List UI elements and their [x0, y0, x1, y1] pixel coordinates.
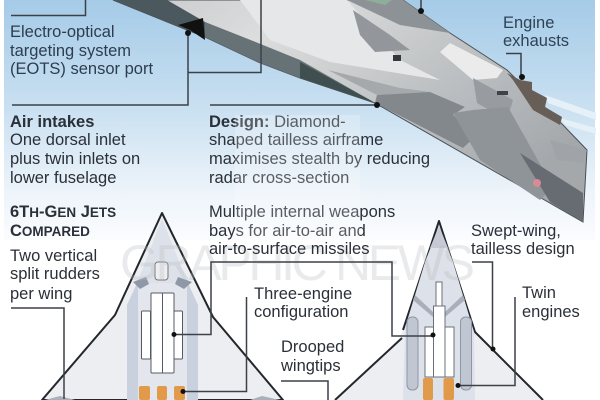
fuselage [113, 0, 587, 222]
text: design: shaped tailless airframe [209, 131, 383, 149]
left jet [42, 213, 283, 400]
dark nose underside [113, 0, 205, 37]
dorsal edge [347, 0, 450, 33]
text: three-engine configuration: Three-engine [254, 285, 352, 303]
watermark: GRAPHIC NEWS [120, 235, 475, 291]
leader: weapons bays [174, 262, 433, 336]
main jet illustration [113, 0, 587, 222]
leader: targeting top-left [11, 0, 86, 16]
text: three-engine configuration: configuration [254, 303, 348, 321]
text: engine exhausts: Engine [503, 14, 554, 32]
fuselage [403, 226, 475, 400]
text: swept-wing: Swept-wing, [471, 222, 561, 240]
text: weapons bays: bays for air-to-air and [209, 222, 366, 240]
text: design: Design: Diamond- [209, 113, 346, 131]
text: air intakes: plus twin inlets on [10, 150, 140, 168]
text: air intakes: One dorsal inlet [10, 131, 126, 149]
dot: three-engine [180, 389, 186, 394]
light plate [440, 43, 503, 80]
text: design: maximises stealth by reducing [209, 150, 430, 168]
rear belly panel [453, 107, 553, 200]
wings [42, 213, 283, 400]
text: split rudders [10, 247, 100, 303]
dark stripes [520, 153, 583, 222]
leader: EOTS [12, 0, 261, 105]
text: twin engines: Twin [522, 284, 556, 302]
lower fold [205, 22, 375, 103]
dot: swept-wing [490, 346, 496, 352]
text: comparison heading: COMPARED [10, 222, 90, 240]
dot: engine exhausts [519, 74, 525, 80]
text: drooped wingtips [280, 338, 344, 375]
leader: drooped wingtips [281, 381, 328, 400]
text: design [209, 113, 430, 187]
text: swept-wing: tailless design [471, 240, 575, 258]
weapons bays [142, 293, 182, 373]
side pods [407, 317, 418, 390]
leader: engine exhausts [506, 54, 521, 77]
three engines [139, 386, 185, 400]
intake fairing [473, 78, 513, 120]
exhaust nozzles [507, 73, 562, 125]
intakes [133, 277, 149, 289]
leader: split rudders [11, 308, 64, 399]
sensor port [178, 18, 205, 40]
right jet [335, 221, 543, 400]
dark wedge [300, 62, 375, 103]
dot: weapons left [172, 332, 176, 337]
dot: EOTS [185, 30, 191, 36]
text: air intakes: lower fuselage [10, 169, 116, 187]
text: split rudders: split rudders [10, 265, 100, 283]
text: weapons bays: Multiple internal weapons [209, 203, 395, 221]
upper dark panel [353, 10, 410, 52]
nose [137, 219, 188, 283]
dot: top dorsal [418, 8, 424, 14]
text: comparison heading: 6TH-GEN JETS [10, 203, 116, 221]
nose cone [430, 226, 448, 248]
text: weapons bays [209, 203, 395, 258]
text: EOTS sensor port: (EOTS) sensor port [10, 60, 153, 78]
dot: weapons right [430, 332, 436, 338]
exhaust trails [545, 95, 596, 134]
text: comparison heading [10, 203, 116, 240]
vent slot [393, 55, 401, 61]
wing tip details [45, 396, 75, 400]
text: design: radar cross-section [209, 169, 349, 187]
text: split rudders: per wing [10, 285, 72, 303]
text: engine exhausts: exhausts [503, 32, 569, 50]
text: EOTS sensor port: Electro-optical [10, 23, 115, 41]
weapons bays [425, 282, 454, 377]
roundel [533, 179, 541, 187]
text: three-engine configuration [254, 285, 352, 321]
wing root struts [413, 295, 433, 317]
text: air intakes [10, 113, 140, 187]
leader: swept-wing [472, 262, 492, 349]
leader: top dorsal [420, 0, 422, 11]
text: engine exhausts [503, 14, 569, 50]
text: swept-wing [471, 222, 575, 258]
leader: three-engine [183, 297, 246, 392]
fuselage band [127, 283, 198, 400]
text: air intakes: Air intakes [10, 113, 94, 131]
cockpit [155, 262, 168, 280]
watermark panel [235, 115, 360, 240]
text: twin engines [522, 284, 580, 321]
dot: twin engines [456, 383, 460, 388]
dark belly panel [375, 92, 477, 148]
text: EOTS sensor port: targeting system [10, 42, 131, 60]
text: drooped wingtips: Drooped [281, 338, 344, 356]
right tip panel [550, 140, 587, 163]
text: drooped wingtips: wingtips [280, 357, 341, 375]
light band [328, 70, 430, 95]
dot: design [374, 102, 380, 108]
text: twin engines: engines [522, 303, 580, 321]
leader: twin engines [458, 297, 515, 386]
text: EOTS sensor port [10, 23, 153, 78]
background panel [4, 0, 595, 240]
white highlight [240, 0, 440, 80]
text: weapons bays: air-to-surface missiles [209, 240, 369, 258]
leader: design [210, 104, 377, 106]
text: split rudders: Two vertical [10, 247, 97, 265]
green canopy tint [365, 0, 392, 5]
twin engines [423, 378, 454, 400]
